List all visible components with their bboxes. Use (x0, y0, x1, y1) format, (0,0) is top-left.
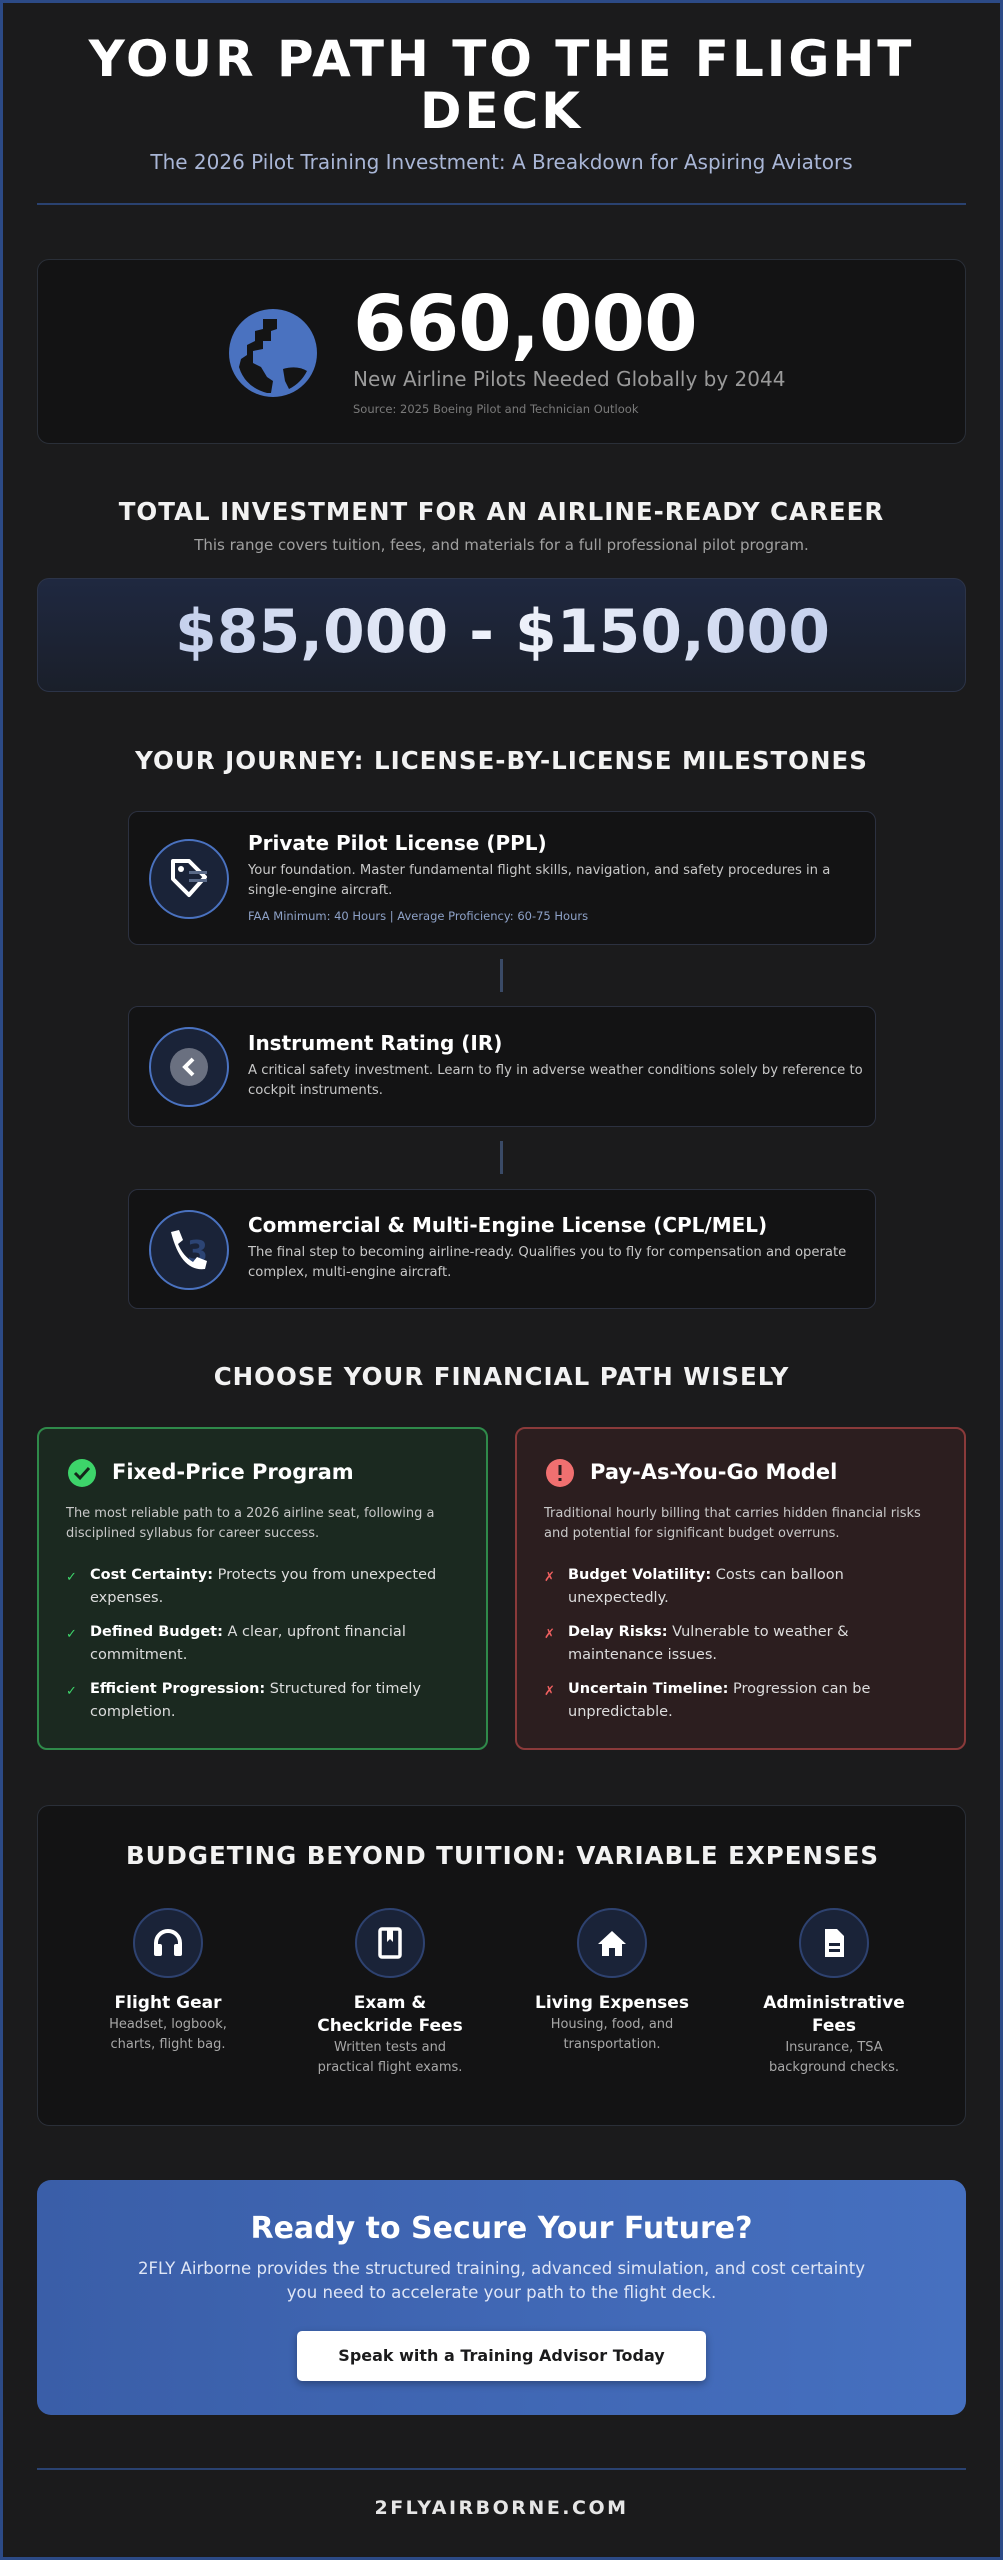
expense: flight gear: charts, flight bag. (111, 2037, 225, 2052)
expense: living: Living Expenses (535, 1993, 689, 2013)
expense: exam fees: Written tests and (334, 2040, 446, 2055)
icon: chevron (149, 1027, 229, 1107)
big number: 660,000 (353, 280, 697, 369)
panel: fixed-price: The most reliable path to a 2026 airline seat, following a disciplined syllabus for career success. (66, 1506, 435, 1541)
milestone: CPL/MEL (128, 1189, 876, 1309)
milestone: PPL: FAA Minimum: 40 Hours | Average Proficiency: 60-75 Hours (248, 909, 588, 923)
panel: pay-as-you-go: ✗ (544, 1684, 555, 1699)
expense: flight gear: Headset, logbook, (109, 2017, 227, 2032)
expense: exam fees (317, 1908, 463, 2075)
expense: living (535, 1908, 689, 2052)
expense: admin (763, 1908, 905, 2075)
cta text (138, 2259, 865, 2302)
milestone: CPL/MEL: Commercial & Multi-Engine License (CPL/MEL) (248, 1213, 767, 1237)
heading: financial path: CHOOSE YOUR FINANCIAL PATH WISELY (214, 1362, 789, 1391)
cta button: Speak with a Training Advisor Today (338, 2346, 665, 2365)
panel: fixed-price (37, 1427, 488, 1750)
icon: tag (149, 839, 229, 919)
panel: fixed-price: Fixed-Price Program (112, 1460, 354, 1484)
milestone: CPL/MEL: The final step to becoming airline-ready. Qualifies you to fly for compensation and operate complex, multi-engine aircraft. (248, 1245, 846, 1280)
panel: fixed-price: ✓ (66, 1627, 77, 1642)
panel: pay-as-you-go: Uncertain Timeline: Progression can be unpredictable. (568, 1681, 870, 1720)
panel: fixed-price: ✓ (66, 1684, 77, 1699)
footer: 2FLYAIRBORNE.COM (374, 2497, 629, 2519)
expense: admin: Insurance, TSA (785, 2040, 883, 2055)
panel: pay-as-you-go: Budget Volatility: Costs can balloon unexpectedly. (568, 1567, 844, 1606)
title: DECK (420, 82, 583, 140)
expense: flight gear: Flight Gear (115, 1993, 221, 2013)
expense: admin: Fees (812, 2016, 856, 2036)
panel: pay-as-you-go (515, 1427, 966, 1750)
cta heading: Ready to Secure Your Future? (250, 2211, 753, 2246)
panel: pay-as-you-go: ✗ (544, 1627, 555, 1642)
stat caption: New Airline Pilots Needed Globally by 2044 (353, 367, 785, 391)
cta text: 2FLY Airborne provides the structured training, advanced simulation, and cost certainty (138, 2259, 865, 2278)
panel: pay-as-you-go: ✗ (544, 1570, 555, 1585)
panel: stat card (37, 259, 966, 444)
icon: phone: 3 (187, 1235, 208, 1270)
panel: fixed-price: Defined Budget: A clear, upfront financial commitment. (90, 1624, 406, 1663)
text: range note: This range covers tuition, fees, and materials for a full professional pilot program. (194, 536, 809, 554)
panel: price range: $85,000 - $150,000 (175, 597, 830, 667)
expense: admin: background checks. (769, 2060, 899, 2075)
milestone: IR: Instrument Rating (IR) (248, 1031, 502, 1055)
milestone: PPL: Your foundation. Master fundamental flight skills, navigation, and safety procedures in a single-engine aircraft. (248, 863, 830, 898)
heading: variable expenses: BUDGETING BEYOND TUITION: VARIABLE EXPENSES (126, 1841, 879, 1870)
expense: living: transportation. (563, 2037, 661, 2052)
panel: pay-as-you-go: Traditional hourly billing that carries hidden financial risks and potential for significant budget overruns. (544, 1506, 921, 1541)
icon: globe (229, 309, 317, 397)
expense: admin: Administrative (763, 1993, 905, 2013)
heading: total investment: TOTAL INVESTMENT FOR AN AIRLINE-READY CAREER (119, 497, 884, 526)
icon: phone (149, 1210, 229, 1290)
source: Source: 2025 Boeing Pilot and Technician Outlook (353, 402, 638, 416)
milestone: PPL: Private Pilot License (PPL) (248, 831, 547, 855)
title: YOUR PATH TO THE FLIGHT (89, 30, 914, 88)
title (88, 30, 914, 140)
panel: pay-as-you-go: Delay Risks: Vulnerable to weather & maintenance issues. (568, 1624, 849, 1663)
cta text: you need to accelerate your path to the flight deck. (287, 2283, 716, 2302)
expense: exam fees: Checkride Fees (317, 2016, 463, 2036)
panel: pay-as-you-go: Pay-As-You-Go Model (590, 1460, 837, 1484)
subtitle: The 2026 Pilot Training Investment: A Breakdown for Aspiring Aviators (150, 150, 853, 174)
expense: exam fees: Exam & (354, 1993, 426, 2013)
icon: alert (546, 1459, 574, 1487)
cta button (297, 2331, 706, 2381)
expense: flight gear (109, 1908, 227, 2052)
expense: living: Housing, food, and (551, 2017, 673, 2032)
panel: fixed-price: ✓ (66, 1570, 77, 1585)
panel: price range (37, 578, 966, 692)
panel: variable expenses (37, 1805, 966, 2126)
expense: exam fees: practical flight exams. (318, 2060, 462, 2075)
milestone: IR: A critical safety investment. Learn to fly in adverse weather conditions solely by reference to cockpit instruments. (248, 1063, 863, 1098)
milestone: IR (128, 1006, 876, 1127)
milestone: PPL (128, 811, 876, 945)
panel: fixed-price: Cost Certainty: Protects you from unexpected expenses. (90, 1567, 436, 1606)
panel: call to action (37, 2180, 966, 2415)
heading: journey: YOUR JOURNEY: LICENSE-BY-LICENSE MILESTONES (135, 746, 868, 775)
icon: check (68, 1459, 96, 1487)
panel: fixed-price: Efficient Progression: Structured for timely completion. (90, 1681, 421, 1720)
